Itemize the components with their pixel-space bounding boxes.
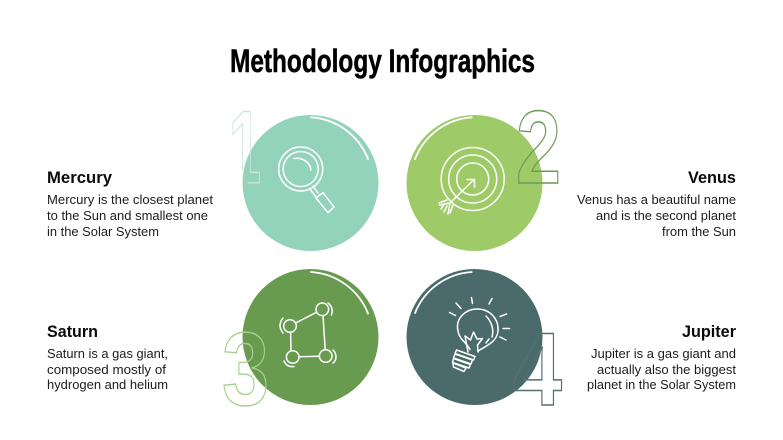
title: Methodology Infographics — [230, 43, 535, 79]
text block: Venus — [577, 169, 736, 239]
text block: Venus: and is the second planet — [596, 208, 736, 223]
icon: magnifying glass — [279, 147, 334, 213]
number 4: 4 — [513, 312, 562, 428]
text block: Mercury: Mercury is the closest planet — [47, 192, 213, 207]
panel: Saturn circle — [242, 269, 378, 405]
text block: Saturn — [47, 323, 168, 392]
text block: Jupiter: planet in the Solar System — [587, 377, 736, 392]
text block: Mercury: to the Sun and smallest one — [47, 208, 208, 223]
text block: Mercury: in the Solar System — [47, 224, 159, 239]
text block: Saturn: composed mostly of — [47, 362, 166, 377]
text block: Venus: Venus — [688, 169, 736, 187]
text block: Saturn: Saturn — [47, 323, 98, 341]
text block: Jupiter — [587, 323, 737, 392]
text block: Venus: Venus has a beautiful name — [577, 192, 736, 207]
text block: Venus: from the Sun — [662, 224, 736, 239]
text block: Jupiter: actually also the biggest — [597, 362, 736, 377]
number 1: 1 — [229, 90, 261, 206]
text block: Saturn: Saturn is a gas giant, — [47, 346, 168, 361]
panel: Mercury circle — [242, 115, 378, 251]
icon: light bulb — [450, 298, 510, 372]
text block: Jupiter: Jupiter is a gas giant and — [591, 346, 736, 361]
number 2: 2 — [516, 90, 561, 206]
icon: connected nodes — [280, 303, 336, 367]
text block: Mercury — [47, 169, 213, 239]
icon: target with arrow — [439, 148, 504, 214]
text block: Jupiter: Jupiter — [682, 323, 737, 341]
panel: Venus circle — [406, 115, 542, 251]
number 3: 3 — [222, 312, 269, 428]
panel: Jupiter circle — [406, 269, 542, 405]
text block: Mercury: Mercury — [47, 169, 113, 187]
text block: Saturn: hydrogen and helium — [47, 377, 168, 392]
